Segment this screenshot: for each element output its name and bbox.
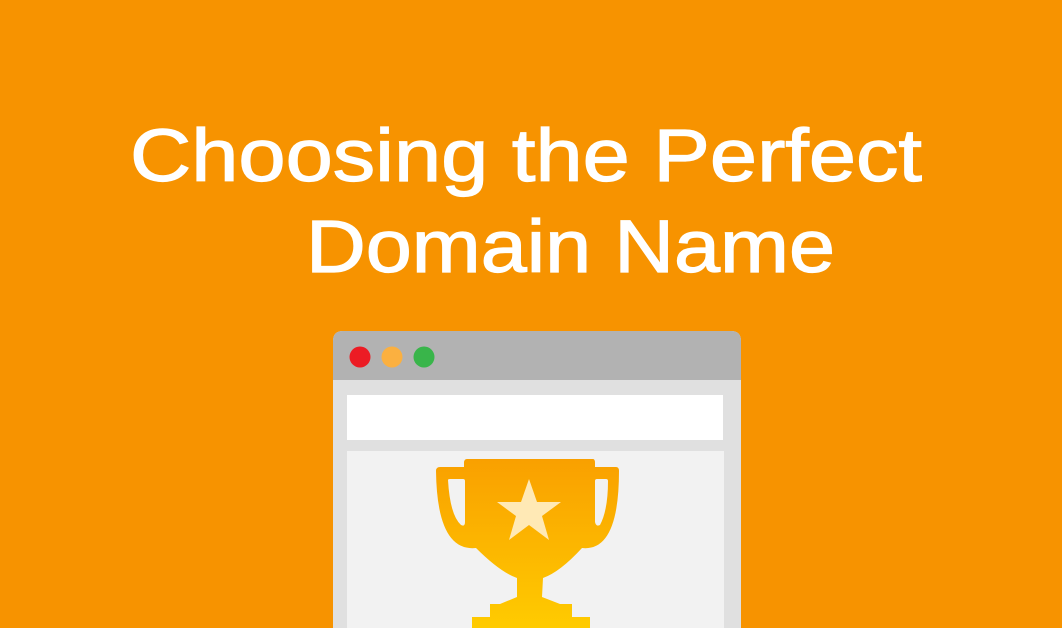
address bar <box>347 395 723 440</box>
title <box>130 114 923 288</box>
window buttons <box>350 346 434 368</box>
icon: trophy <box>436 459 619 628</box>
title bar <box>333 331 741 380</box>
browser window <box>333 331 741 628</box>
icon: star <box>497 479 561 540</box>
title: Domain Name <box>306 205 835 288</box>
title: Choosing the Perfect <box>130 114 923 197</box>
content panel <box>347 451 724 628</box>
